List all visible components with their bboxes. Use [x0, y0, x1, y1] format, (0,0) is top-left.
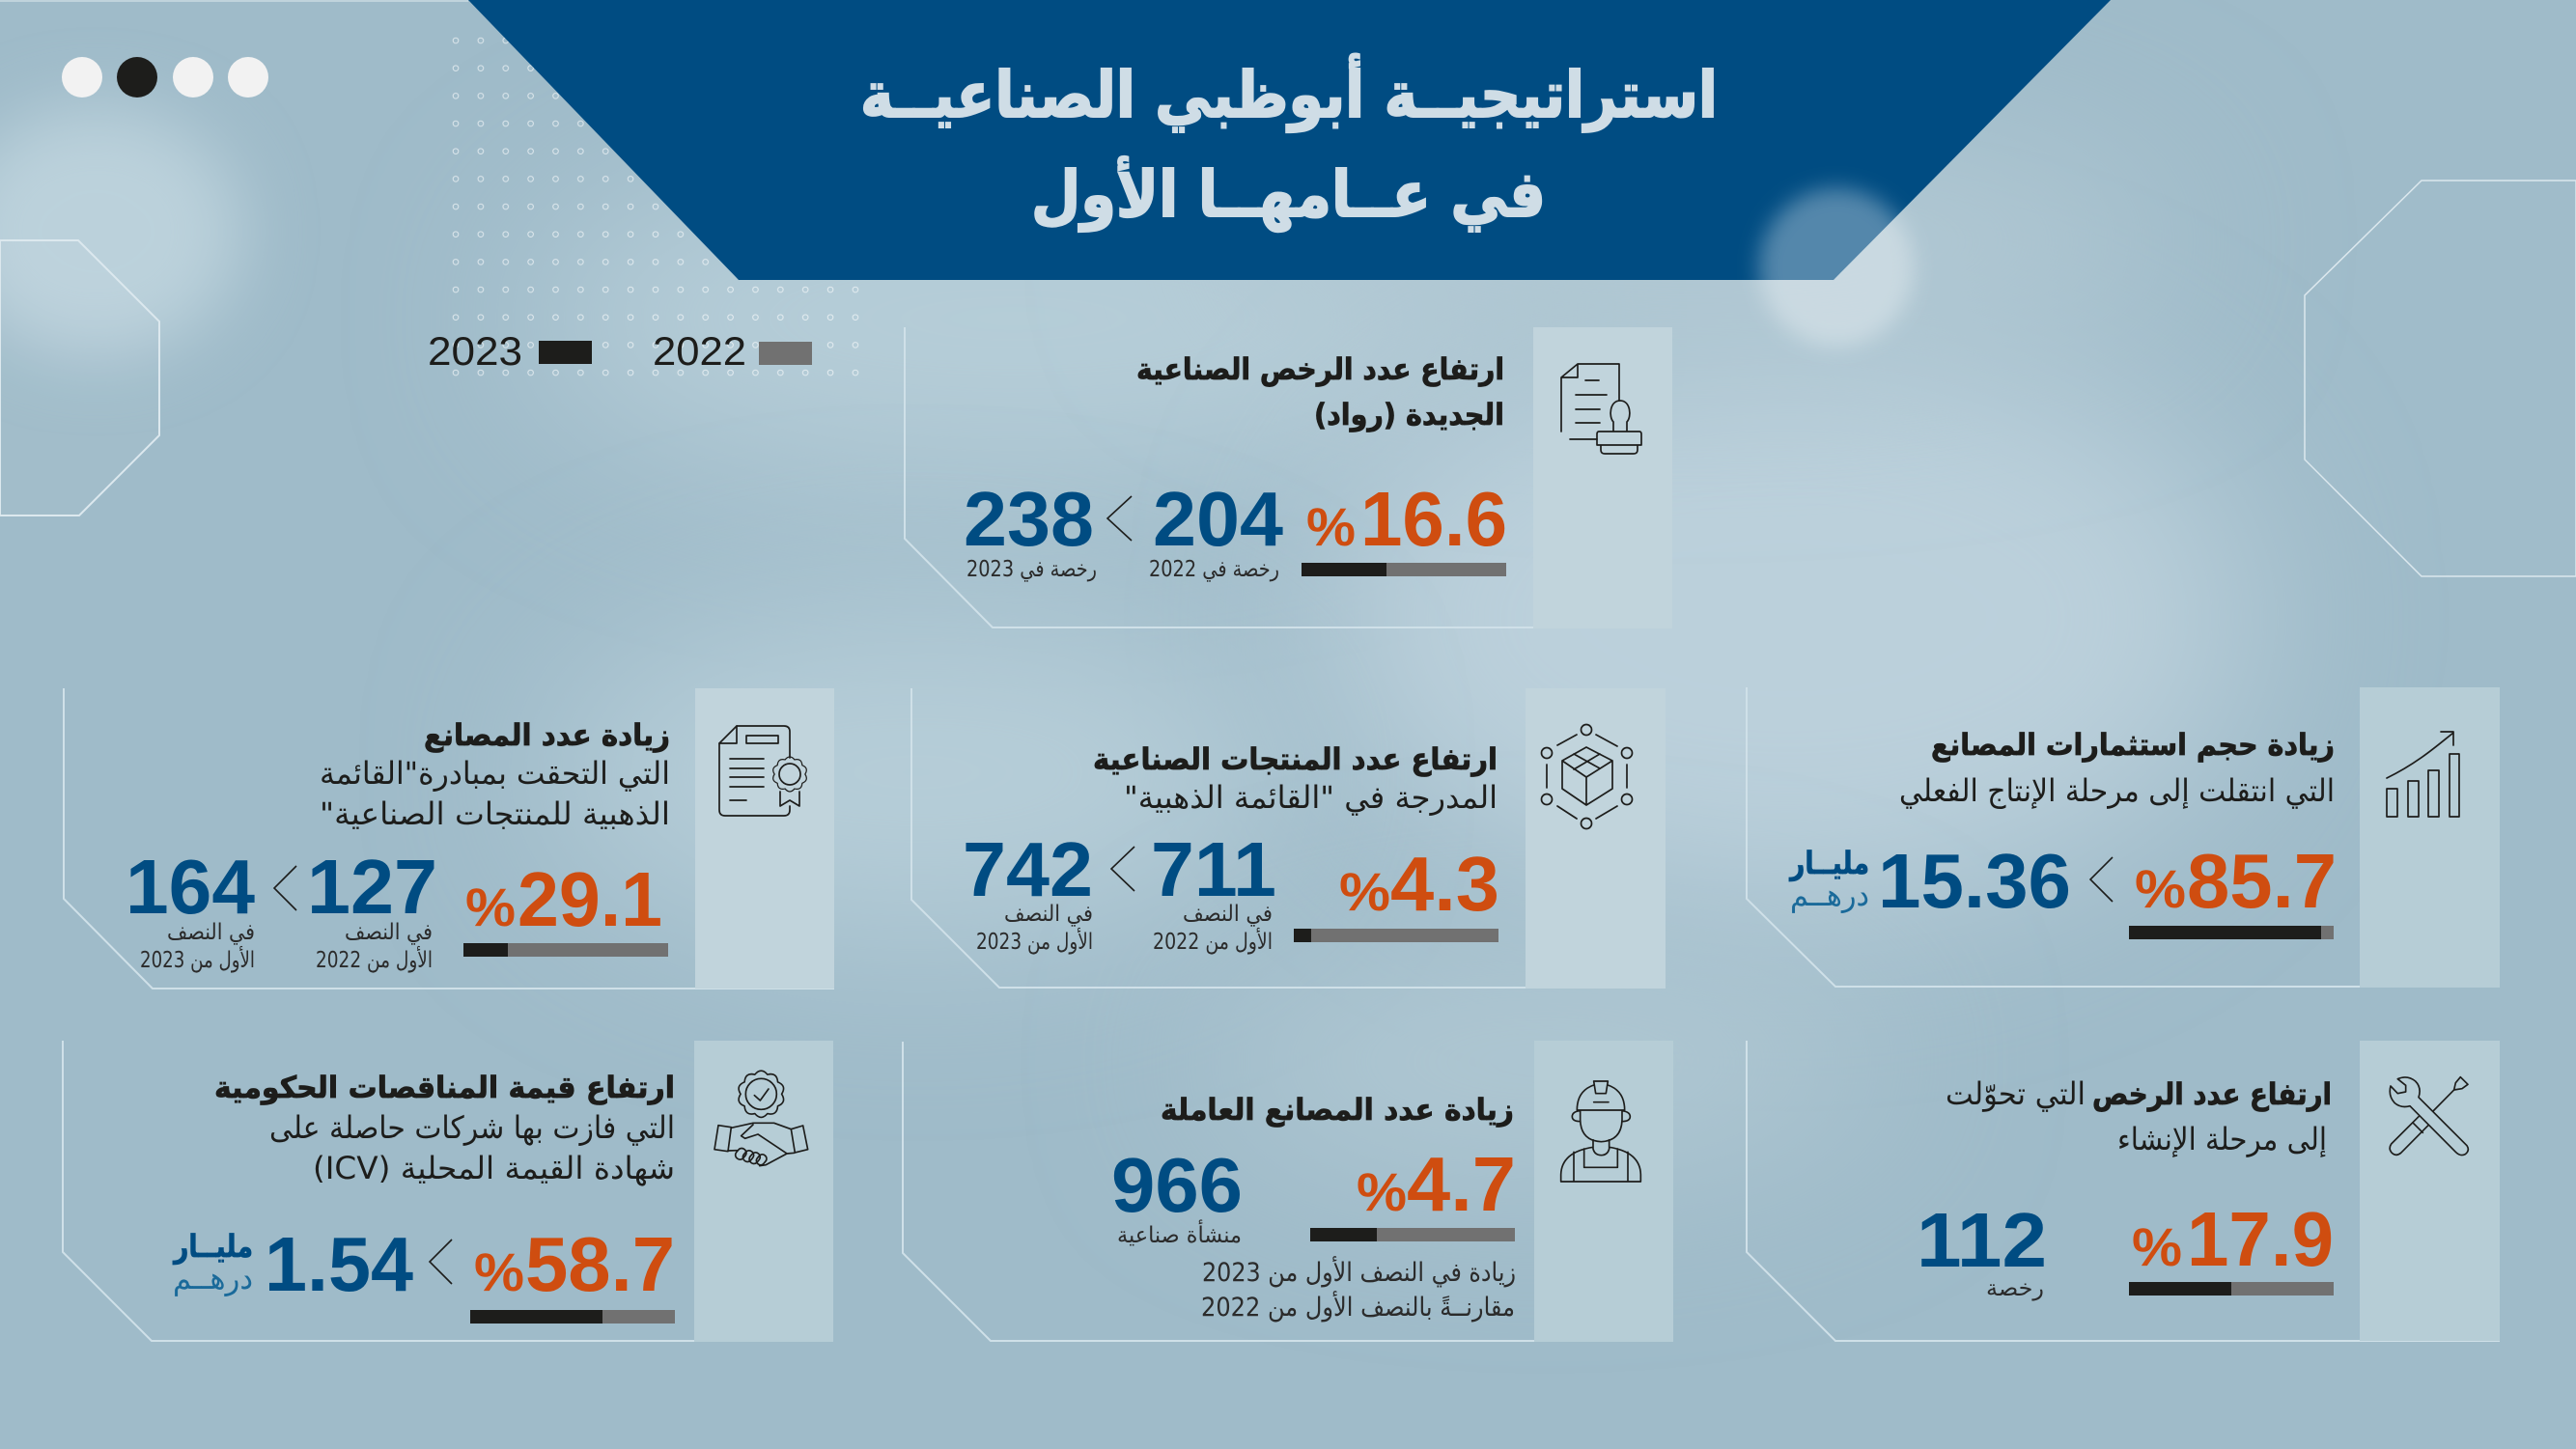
- stat: 2022: [1151, 826, 1276, 955]
- icon: growth chart: [2387, 732, 2459, 817]
- heading: زيادة عدد المصانع: [424, 718, 670, 753]
- note: مقارنــةً بالنصف الأول من 2022: [1201, 1290, 1515, 1323]
- panel: operating factories: [903, 1041, 1673, 1342]
- heading: التي التحقت بمبادرة"القائمة: [320, 755, 670, 792]
- stat: percent: 58.7: [525, 1221, 675, 1307]
- stat: value: مليــار: [1788, 845, 1869, 881]
- progress bar: [470, 1310, 675, 1324]
- heading: ارتفاع عدد الرخص: [2092, 1077, 2332, 1112]
- stat: 2023: الأول من 2023: [976, 928, 1093, 955]
- progress bar: [2129, 1282, 2334, 1296]
- arrow: [1107, 496, 1132, 541]
- stat: value: درهــم: [1790, 877, 1869, 913]
- stat: percent: %: [1339, 861, 1390, 922]
- heading: [1899, 728, 2335, 809]
- arrow: [1111, 847, 1134, 891]
- heading: التي فازت بها شركات حاصلة على: [269, 1109, 675, 1146]
- stat: percent: 17.9: [2187, 1196, 2334, 1282]
- stat: 2022: الأول من 2022: [1153, 928, 1273, 955]
- title: في عــامهــا الأول: [1031, 155, 1546, 233]
- title: استراتيجيــة أبوظبي الصناعيــة: [860, 53, 1718, 133]
- decorative octagon right: [2305, 181, 2576, 576]
- heading: ارتفاع عدد الرخص الصناعية: [1136, 352, 1504, 387]
- header banner: [468, 0, 2111, 280]
- icon: worker: [1561, 1081, 1640, 1182]
- stat: 2023: رخصة في 2023: [966, 557, 1097, 582]
- stat: percent: 4.7: [1407, 1141, 1516, 1227]
- stat: 2023: [963, 826, 1093, 955]
- panel: government tenders: [63, 1041, 833, 1342]
- dots indicator: [62, 57, 268, 98]
- stat: percent: %: [1357, 1161, 1407, 1222]
- stat: value: [172, 1221, 414, 1307]
- heading: [1136, 352, 1504, 432]
- legend: 2023: [428, 328, 522, 374]
- heading: زيادة عدد المصانع العاملة: [1161, 1093, 1514, 1128]
- decorative octagon left: [0, 240, 159, 516]
- stat: 2023: [126, 844, 256, 973]
- heading: إلى مرحلة الإنشاء: [2117, 1121, 2327, 1157]
- stat: percent: %: [1306, 496, 1356, 557]
- stat: percent: %: [465, 877, 516, 937]
- heading: [214, 1071, 675, 1186]
- heading: الذهبية للمنتجات الصناعية": [320, 795, 670, 832]
- stat: percent: %: [474, 1241, 524, 1302]
- icon: tools: [2390, 1077, 2468, 1156]
- panel: factories in golden list: [64, 688, 834, 989]
- stat: 2023: في النصف: [167, 920, 255, 945]
- progress bar: [1302, 563, 1506, 576]
- dot grid: [443, 26, 868, 386]
- stat: 2022: في النصف: [1183, 902, 1273, 927]
- stat: percent: 16.6: [1360, 476, 1507, 562]
- stat: value: [1788, 838, 2071, 924]
- heading: المدرجة في "القائمة الذهبية": [1124, 779, 1498, 816]
- stat: licences: 112: [1917, 1197, 2047, 1283]
- panel: industrial products in golden list: [911, 688, 1666, 989]
- stat: 2022: 204: [1153, 476, 1284, 562]
- panel: new industrial licences: [905, 327, 1672, 628]
- stat: 2022: الأول من 2022: [316, 946, 433, 973]
- stat: percent: 29.1: [518, 856, 662, 942]
- note: زيادة في النصف الأول من 2023: [1202, 1255, 1516, 1288]
- stat: 2023: 238: [964, 476, 1094, 562]
- stat: 2023: 742: [963, 826, 1093, 912]
- heading: [1946, 1075, 2332, 1157]
- note: [1201, 1255, 1516, 1323]
- heading: [320, 718, 670, 832]
- stat: value: درهــم: [173, 1260, 253, 1296]
- stat: value: 1.54: [265, 1221, 414, 1307]
- stat: percent: %: [2132, 1216, 2182, 1277]
- stat: percent: [1357, 1141, 1516, 1227]
- legend: [428, 328, 812, 374]
- progress bar: [2129, 926, 2334, 939]
- arrow: [274, 866, 296, 910]
- stat: percent: 85.7: [2187, 838, 2337, 924]
- heading: ارتفاع قيمة المناقصات الحكومية: [214, 1071, 675, 1105]
- stat: licences: رخصة: [1986, 1276, 2044, 1301]
- icon: certificate: [719, 726, 806, 816]
- stat: 2022: 127: [307, 844, 437, 930]
- stat: factories: 966: [1111, 1142, 1243, 1228]
- stat: 2023: 164: [126, 844, 256, 930]
- progress bar: [463, 943, 668, 957]
- arrow: [430, 1240, 452, 1284]
- stat: percent: [1339, 841, 1499, 927]
- stat: value: 15.36: [1878, 838, 2071, 924]
- legend: 2022: [653, 328, 746, 374]
- heading: التي انتقلت إلى مرحلة الإنتاج الفعلي: [1899, 772, 2335, 809]
- progress bar: [1310, 1228, 1515, 1241]
- icon: product network: [1541, 724, 1632, 828]
- stat: percent: 4.3: [1390, 841, 1499, 927]
- heading: ارتفاع عدد المنتجات الصناعية: [1093, 742, 1498, 777]
- icon: badge and handshake: [714, 1071, 808, 1166]
- heading: زيادة حجم استثمارات المصانع: [1931, 728, 2335, 763]
- heading: التي تحوّلت: [1946, 1075, 2086, 1112]
- arrow: [2090, 857, 2113, 902]
- stat: 2023: في النصف: [1004, 902, 1093, 927]
- stat: 2022: في النصف: [345, 920, 433, 945]
- stat: percent: %: [2135, 858, 2186, 919]
- stat: factories: منشأة صناعية: [1117, 1219, 1242, 1248]
- stat: 2022: 711: [1151, 826, 1276, 912]
- title: [860, 53, 1718, 233]
- progress bar: [1294, 929, 1498, 942]
- heading: شهادة القيمة المحلية (ICV): [313, 1150, 675, 1186]
- light spot: [1759, 188, 1914, 347]
- heading: الجديدة (رواد): [1314, 398, 1504, 432]
- stat: value: مليــار: [172, 1228, 253, 1265]
- stat: 2023: الأول من 2023: [140, 946, 255, 973]
- panel: factory investments: [1747, 687, 2500, 988]
- heading: [1093, 742, 1498, 816]
- stat: 2022: رخصة في 2022: [1149, 557, 1279, 582]
- stat: 2022: [307, 844, 437, 973]
- panel: licences to construction: [1747, 1041, 2500, 1341]
- icon: document and stamp: [1561, 364, 1641, 454]
